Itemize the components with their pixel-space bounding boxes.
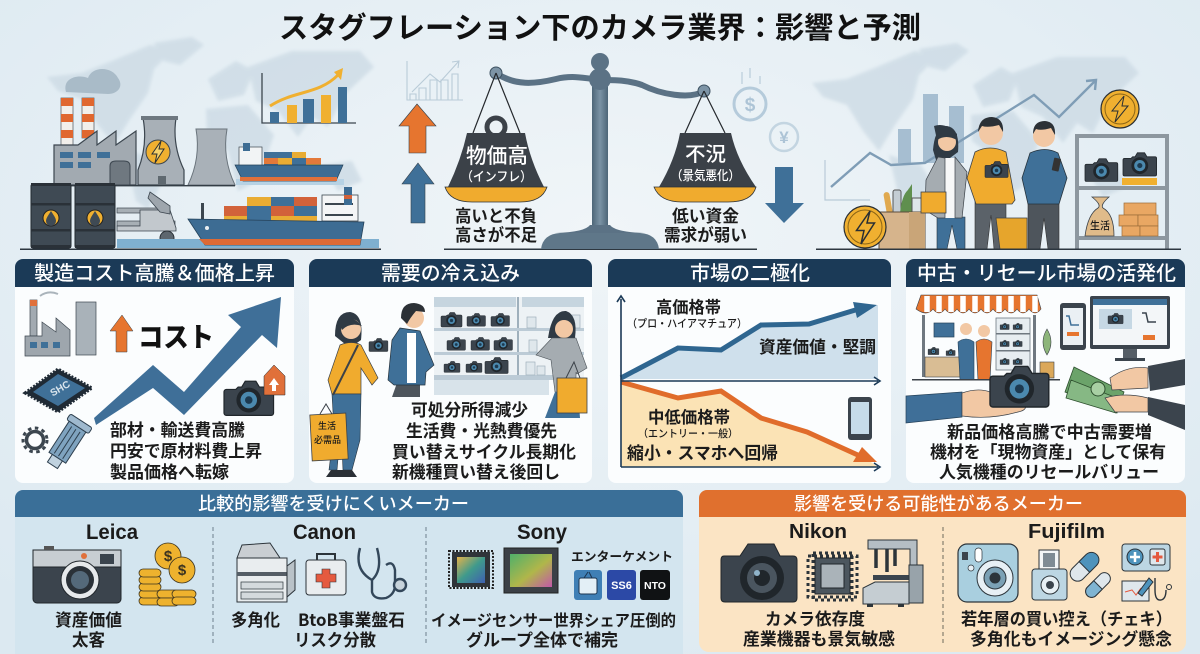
illustration: balance scale of inflation versus recession — [399, 53, 804, 250]
maker: Canon — [231, 521, 406, 651]
resale text — [930, 418, 1166, 483]
maker: Leica: Leica — [86, 521, 138, 544]
falling coin icons: $ — [745, 95, 756, 116]
icon: chip: SHC — [49, 379, 72, 399]
left weight: inflation: （インフレ） — [461, 166, 532, 185]
resale text: 人気機種のリセールバリュー — [939, 458, 1159, 483]
right weight: recession: （景気悪化） — [671, 165, 740, 184]
left weight caption: 高いと不負 — [455, 202, 537, 227]
icon: camera with price tag — [224, 365, 285, 415]
demand text: 生活費・光熱費優先 — [406, 417, 557, 442]
panel heading — [699, 490, 1186, 517]
Sony text: グループ全体で補完 — [466, 626, 618, 651]
icon: chart pen and stethoscope — [1122, 578, 1172, 601]
panel heading: 製造コスト高騰＆価格上昇 — [34, 257, 275, 286]
panel: demand cooling — [309, 257, 592, 483]
illustration: supply-side costs with factory, oil and ships — [20, 37, 381, 250]
cooling tower with power symbol — [138, 116, 184, 185]
panel heading — [309, 257, 592, 287]
right weight caption: 需求が弱い — [664, 221, 747, 246]
Sony text: イメージセンサー世界シェア圧倒的 — [431, 607, 676, 631]
ground line left — [20, 248, 381, 250]
blue down arrow — [765, 167, 804, 223]
panel: used and resale market — [906, 257, 1185, 483]
woman with camera and shopping bag: 生活 — [318, 419, 336, 432]
woman looking at phone with bag — [536, 311, 587, 418]
large container ship — [188, 187, 364, 245]
falling coin icons — [734, 68, 798, 151]
icon: orange up arrow — [110, 315, 133, 352]
panel: less affected makers — [15, 490, 683, 654]
icon: stethoscope — [358, 548, 406, 598]
Fujifilm text: 多角化もイメージング懸念 — [970, 625, 1172, 650]
cost text: 部材・輸送費高騰 — [110, 416, 245, 441]
Canon text: BtoB事業盤石 — [298, 606, 405, 631]
icon: online store monitor — [1090, 296, 1170, 361]
man on phone — [388, 303, 434, 397]
maker: Leica — [33, 521, 196, 651]
icon: gold coins — [139, 543, 196, 606]
Leica text: 資産価値 — [55, 606, 122, 631]
used camera shop — [912, 295, 1060, 380]
icon: entertainment tiles: NTO — [644, 580, 666, 592]
icon: medical equipment panel — [1122, 544, 1170, 571]
Fujifilm text: 若年層の買い控え（チェキ） — [961, 605, 1172, 630]
Nikon text — [743, 605, 895, 650]
shelf with cameras and goods: 生活 — [1090, 218, 1110, 233]
scale pole and beam — [490, 53, 710, 249]
right weight caption — [664, 202, 747, 246]
woman with bag — [921, 125, 967, 249]
icon: gold coins: $ — [164, 548, 173, 565]
bolt coin top — [1101, 90, 1139, 128]
panel heading: 影響を受ける可能性があるメーカー — [794, 490, 1083, 516]
line under factory — [54, 185, 235, 186]
icon: entertainment tiles — [574, 570, 670, 600]
Leica text: 太客 — [72, 626, 105, 651]
small container ship — [235, 143, 344, 185]
maker: Fujifilm: Fujifilm — [1028, 521, 1105, 543]
title: スタグフレーション下のカメラ業界：影響と予測 — [279, 5, 921, 47]
icon: semiconductor chip — [808, 553, 857, 600]
icon: smartphone — [848, 397, 872, 440]
factory — [54, 98, 136, 185]
panel heading: 中古・リセール市場の活発化 — [917, 257, 1176, 286]
water — [117, 239, 379, 248]
resale text: 機材を「現物資産」として保有 — [930, 438, 1166, 463]
icon: industrial machine — [863, 540, 923, 607]
cost text: 円安で原材料費上昇 — [110, 437, 262, 462]
rising cost arrow — [94, 297, 281, 425]
man holding camera — [967, 117, 1027, 249]
icon: smartphone shop — [1060, 303, 1086, 350]
Fujifilm text — [961, 605, 1172, 650]
ground line right — [816, 248, 1181, 250]
icon: printer camera — [1032, 550, 1067, 600]
demand text — [392, 396, 576, 483]
Nikon text: カメラ依存度 — [765, 605, 865, 630]
entertainment label: エンターケメント — [571, 546, 673, 565]
icon: entertainment tiles: SS6 — [611, 580, 632, 592]
polarisation chart — [617, 294, 880, 471]
label: mid-low segment — [638, 404, 738, 441]
maker: Nikon: Nikon — [789, 521, 847, 543]
icon: medical box — [306, 554, 346, 595]
left weight: inflation — [445, 73, 547, 202]
blue up arrow — [402, 163, 434, 223]
man with smartphone — [1022, 121, 1067, 249]
rising bar chart — [262, 68, 356, 123]
store shelves with cameras — [434, 297, 584, 395]
icon: image sensor chip — [449, 551, 493, 588]
faint rising chart — [825, 80, 1096, 200]
woman with camera and shopping bag: 必需品 — [314, 433, 341, 446]
left weight caption: 高さが不足 — [455, 221, 537, 246]
bolt coin bottom — [844, 206, 886, 248]
demand text: 可処分所得減少 — [411, 396, 528, 421]
Canon text — [231, 606, 405, 651]
panel: manufacturing cost — [15, 257, 294, 483]
Nikon text: 産業機器も景気敏感 — [743, 625, 895, 650]
left weight: inflation: 物価高 — [466, 140, 528, 170]
panel: market polarisation — [608, 257, 891, 483]
shelf with cameras and goods — [1077, 136, 1167, 249]
panel heading: 市場の二極化 — [690, 257, 810, 286]
icon: lens barrel part — [42, 414, 92, 472]
world map backdrop left — [47, 37, 374, 209]
label: high-price segment — [627, 294, 747, 331]
resale text: 新品価格高騰で中古需要増 — [947, 418, 1152, 443]
icon: large sensor — [504, 548, 558, 593]
orange up arrow — [399, 104, 436, 153]
second cooling tower — [188, 129, 235, 185]
left weight caption — [455, 202, 537, 246]
right weight: recession: 不況 — [685, 138, 726, 167]
label: mid-low segment: 中低価格帯 — [648, 404, 730, 428]
label: high-price segment: 高価格帯 — [656, 294, 721, 318]
maker: Fujifilm — [958, 521, 1172, 650]
panel heading: 需要の冷え込み — [381, 257, 520, 286]
faint chart — [407, 61, 463, 100]
right weight caption: 低い資金 — [672, 202, 739, 227]
panel heading — [608, 257, 891, 287]
money and hands — [1065, 359, 1185, 430]
cost text: 製品価格へ転嫁 — [110, 458, 229, 483]
freight machine — [117, 192, 176, 245]
label: asset value: 資産価値・堅調 — [759, 333, 876, 358]
maker: Nikon — [721, 521, 923, 650]
maker: Sony: Sony — [517, 521, 567, 544]
panel heading: 比較的影響を受けにくいメーカー — [198, 490, 469, 516]
grocery box — [879, 184, 925, 249]
demand text: 新機種買い替え後回し — [392, 458, 560, 483]
icon: gear — [23, 428, 47, 452]
label: high-price segment: （プロ・ハイアマチュア） — [627, 315, 747, 331]
cost label: コスト — [138, 316, 214, 355]
icon: chip — [25, 369, 92, 412]
smoke cloud — [65, 69, 120, 94]
Canon text: 多角化 — [231, 606, 280, 631]
ground line centre — [444, 248, 757, 250]
label: shrink to smartphone: 縮小・スマホへ回帰 — [627, 439, 778, 464]
world map backdrop right — [812, 43, 1139, 215]
hand passing camera — [906, 366, 1049, 423]
maker: Canon: Canon — [293, 521, 356, 544]
illustration: consumers squeezed with cameras and household goods — [812, 43, 1181, 250]
icon: medicine capsules — [1067, 549, 1113, 600]
Sony text — [431, 607, 676, 651]
icon: DSLR camera — [721, 544, 797, 602]
icon: instant camera — [958, 544, 1018, 602]
maker: Sony — [431, 521, 676, 651]
icon: gold coins: $ — [178, 562, 187, 579]
Leica text — [55, 606, 122, 651]
cost text — [110, 416, 262, 483]
icon: factory — [25, 292, 96, 356]
Canon text: リスク分散 — [294, 626, 376, 651]
label: mid-low segment: （エントリー・一般） — [638, 426, 738, 441]
demand text: 買い替えサイクル長期化 — [392, 438, 576, 463]
panel: possibly affected makers — [699, 490, 1186, 652]
woman with camera and shopping bag — [310, 312, 388, 477]
falling coin icons: ¥ — [779, 128, 789, 147]
right weight: recession — [654, 91, 756, 202]
oil barrels — [31, 183, 115, 248]
icon: Leica rangefinder camera — [33, 546, 121, 603]
icon: copier — [237, 543, 295, 602]
panel heading — [15, 490, 683, 517]
